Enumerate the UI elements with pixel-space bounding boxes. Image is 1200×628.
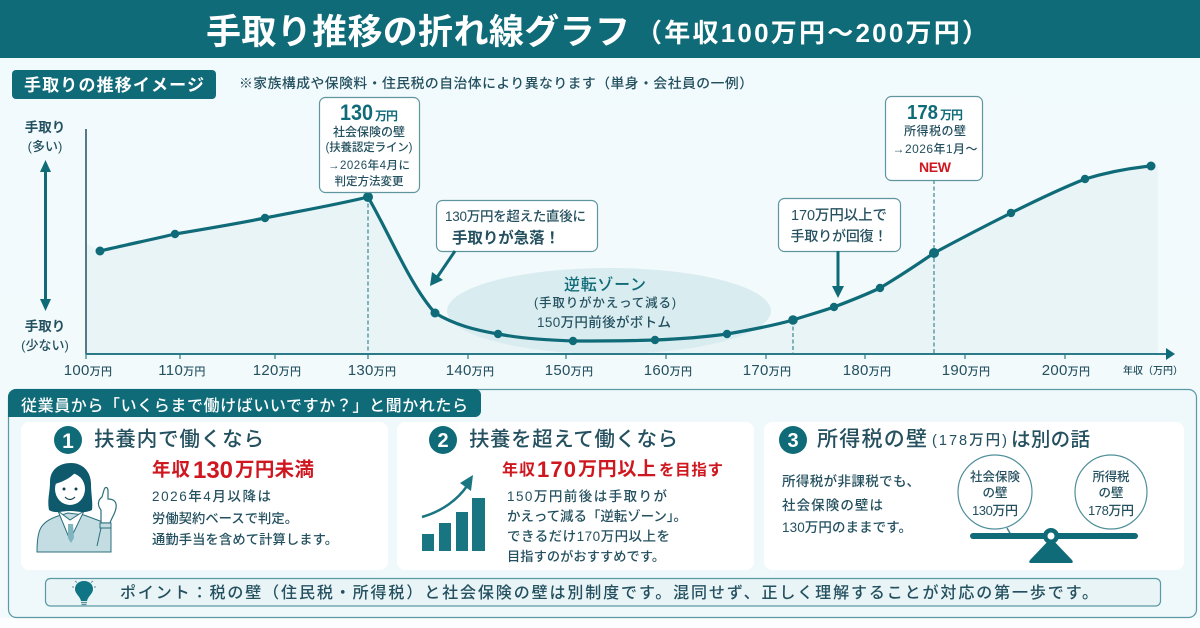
right bubble: income tax wall: 178万円 <box>1088 503 1134 518</box>
callout: 178 man yen wall: →2026年1月〜 <box>892 142 978 156</box>
card 1 body text <box>152 488 338 547</box>
card 3 heading <box>817 428 1090 451</box>
axes <box>85 129 87 354</box>
inversion zone text: 逆転ゾーン <box>564 276 646 294</box>
card 1 body text: 労働契約ベースで判定。 <box>152 511 298 526</box>
callout: 178 man yen wall: 178 <box>907 102 938 124</box>
card 3: income tax wall is separate <box>764 422 1184 570</box>
dashed guide lines <box>368 180 934 354</box>
card 3 heading: は別の話 <box>1011 429 1090 451</box>
x axis labels: 120万円 <box>253 362 301 379</box>
title banner: （年収100万円〜200万円） <box>636 18 988 48</box>
vertical axis labels and arrow <box>21 119 69 353</box>
card 2: working beyond dependent limit <box>397 422 754 570</box>
card 2 body text: できるだけ170万円以上を <box>507 529 670 544</box>
card 1: working within dependent limit <box>21 422 388 570</box>
card 2 body text: 目指すのがおすすめです。 <box>507 548 665 564</box>
x axis labels: 190万円 <box>942 362 990 379</box>
point text: ポイント：税の壁（住民税・所得税）と社会保険の壁は別制度です。混同せず、正しく理解することが対応の第一歩です。 <box>120 583 1098 602</box>
x axis labels: 110万円 <box>158 362 206 379</box>
x axis labels: 150万円 <box>545 362 593 379</box>
right bubble: income tax wall: 所得税 <box>1092 469 1130 484</box>
icon: office worker pointing up <box>37 463 116 552</box>
arrow: to drop point <box>430 251 455 286</box>
callout: take-home recovers: 手取りが回復！ <box>790 228 888 244</box>
point bar <box>46 578 1160 606</box>
card 2 number badge <box>429 426 457 454</box>
icon: balance scale <box>970 528 1138 563</box>
card 1 number badge: 1 <box>62 430 74 453</box>
arrow: to recovery point <box>832 251 844 298</box>
card 1 number badge <box>54 426 82 454</box>
x axis labels <box>64 362 1183 379</box>
panel: advice for employees <box>8 389 1196 618</box>
card 3 number badge: 3 <box>787 430 799 452</box>
left bubble: social insurance wall: の壁 <box>982 486 1008 500</box>
title banner <box>0 0 1200 58</box>
section heading: take-home trend image <box>12 70 216 99</box>
callout: 178 man yen wall: NEW <box>919 159 952 175</box>
card 3 heading: (178万円) <box>932 433 1007 449</box>
section heading: take-home trend image: 手取りの推移イメージ <box>24 75 204 95</box>
icon: rising bar chart with arrow <box>422 475 485 551</box>
callout: 130 man yen wall <box>320 98 420 192</box>
inversion zone text: 150万円前後がボトム <box>537 314 671 330</box>
card 2 highlight <box>502 457 723 482</box>
icon: light bulb <box>72 581 96 604</box>
card 2 body text: 150万円前後は手取りが <box>507 488 668 504</box>
x axis labels: 180万円 <box>843 362 891 379</box>
left bubble: social insurance wall <box>958 455 1032 529</box>
card 3 number badge <box>779 426 807 454</box>
card 1 highlight <box>152 457 314 484</box>
vertical axis labels and arrow: (多い) <box>28 139 62 154</box>
callout: 130 man yen wall: 万円 <box>375 109 398 123</box>
card 1 highlight: 年収 <box>152 459 190 480</box>
inversion zone text: (手取りがかえって減る) <box>534 295 676 310</box>
x axis labels: 170万円 <box>743 362 791 379</box>
title banner: 手取り推移の折れ線グラフ <box>206 13 630 52</box>
note text: ※家族構成や保険料・住民税の自治体により異なります（単身・会社員の一例） <box>239 75 753 91</box>
card 2 highlight: を目指す <box>659 461 723 479</box>
left bubble: social insurance wall: 130万円 <box>972 503 1018 518</box>
x axis labels: 年収（万円） <box>1123 364 1183 377</box>
inversion zone ellipse <box>447 268 771 354</box>
line chart <box>86 129 1175 360</box>
card 3 body text: 130万円のままです。 <box>782 520 912 535</box>
right bubble: income tax wall <box>1075 455 1147 529</box>
right bubble: income tax wall: の壁 <box>1098 486 1124 500</box>
vertical axis labels and arrow: 手取り <box>25 119 65 135</box>
x axis labels: 100万円 <box>64 362 112 379</box>
card 3 body text <box>782 473 920 535</box>
callout: take-home drops sharply: 130万円を超えた直後に <box>445 209 586 224</box>
callout: 178 man yen wall: 万円 <box>940 108 963 122</box>
x axis labels: 130万円 <box>348 362 396 379</box>
card 2 highlight: 年収 <box>502 460 535 479</box>
panel heading <box>8 389 481 417</box>
card 1 body text: 2026年4月以降は <box>152 488 271 504</box>
card 2 heading: 扶養を超えて働くなら <box>469 428 678 451</box>
data points <box>96 162 1156 345</box>
inversion zone text <box>534 276 676 330</box>
card 2 body text <box>507 488 687 564</box>
callout: take-home drops sharply: 手取りが急落！ <box>452 228 560 247</box>
callout: take-home drops sharply <box>436 200 598 252</box>
x axis labels: 200万円 <box>1042 362 1090 379</box>
card 2 body text: かえって減る「逆転ゾーン」。 <box>507 508 687 524</box>
card 3 body text: 所得税が非課税でも、 <box>782 473 920 489</box>
card 1 heading: 扶養内で働くなら <box>94 428 264 451</box>
vertical axis labels and arrow: (少ない) <box>21 338 69 353</box>
card 2 number badge: 2 <box>437 430 449 452</box>
callout: 178 man yen wall: 所得税の壁 <box>904 123 966 138</box>
callout: take-home recovers: 170万円以上で <box>791 207 887 224</box>
callout: 130 man yen wall: 社会保険の壁 <box>333 124 405 139</box>
trend line <box>100 166 1151 341</box>
card 1 highlight: 130 <box>193 457 233 484</box>
x axis labels: 140万円 <box>446 362 494 379</box>
area under curve <box>86 166 1158 354</box>
card 3 heading: 所得税の壁 <box>817 428 927 451</box>
vertical axis labels and arrow: 手取り <box>25 318 65 334</box>
left bubble: social insurance wall: 社会保険 <box>970 469 1020 484</box>
callout: 130 man yen wall: 130 <box>340 100 373 125</box>
card 1 highlight: 万円未満 <box>235 459 314 481</box>
x axis labels: 160万円 <box>644 362 692 379</box>
callout: 130 man yen wall: (扶養認定ライン) <box>326 140 413 154</box>
card 1 body text: 通勤手当を含めて計算します。 <box>152 531 338 547</box>
card 2 highlight: 170 <box>537 457 576 482</box>
card 2 highlight: 万円以上 <box>578 458 656 480</box>
panel heading: 従業員から「いくらまで働けばいいですか？」と聞かれたら <box>21 397 468 415</box>
callout: 130 man yen wall: →2026年4月に <box>328 158 410 172</box>
callout: 178 man yen wall <box>886 96 982 180</box>
callout: 130 man yen wall: 判定方法変更 <box>334 174 404 188</box>
callout: take-home recovers <box>778 198 900 252</box>
card 3 body text: 社会保険の壁は <box>782 498 883 513</box>
